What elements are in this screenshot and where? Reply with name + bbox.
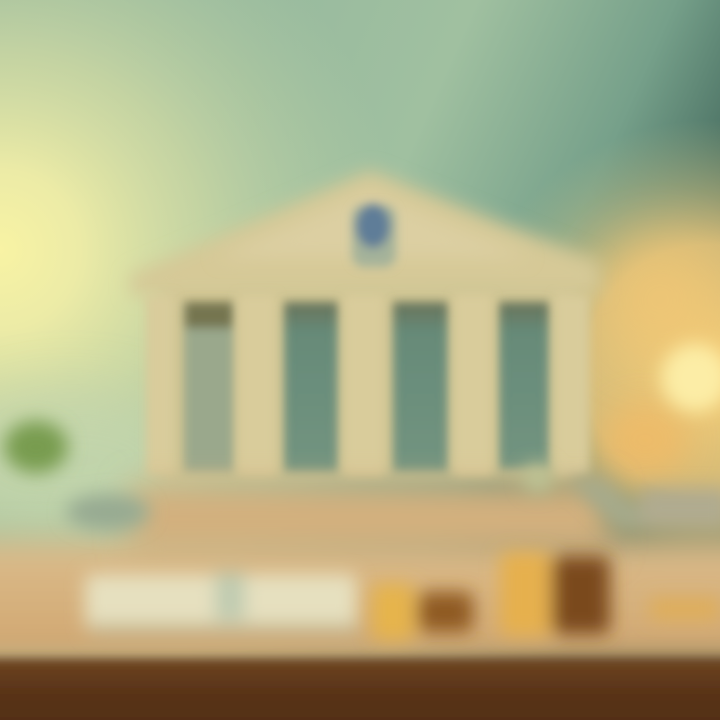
- building: body: [160, 280, 580, 480]
- table: wooden surface: [0, 484, 720, 665]
- building: pediment inner: [215, 190, 530, 258]
- plant: left green shrub: [4, 421, 150, 530]
- building: clock emblem: [352, 204, 396, 267]
- object: banknotes stack: [85, 572, 360, 636]
- building: columns: [146, 295, 589, 475]
- object: right books: [523, 463, 720, 530]
- building: windows between columns: [184, 302, 549, 472]
- light source: right lamp glow: [600, 240, 720, 478]
- table: dark front edge: [0, 658, 720, 720]
- building: classical bank: [130, 170, 600, 480]
- building: pediment: [130, 170, 600, 295]
- object: gold coin stacks: [372, 552, 720, 640]
